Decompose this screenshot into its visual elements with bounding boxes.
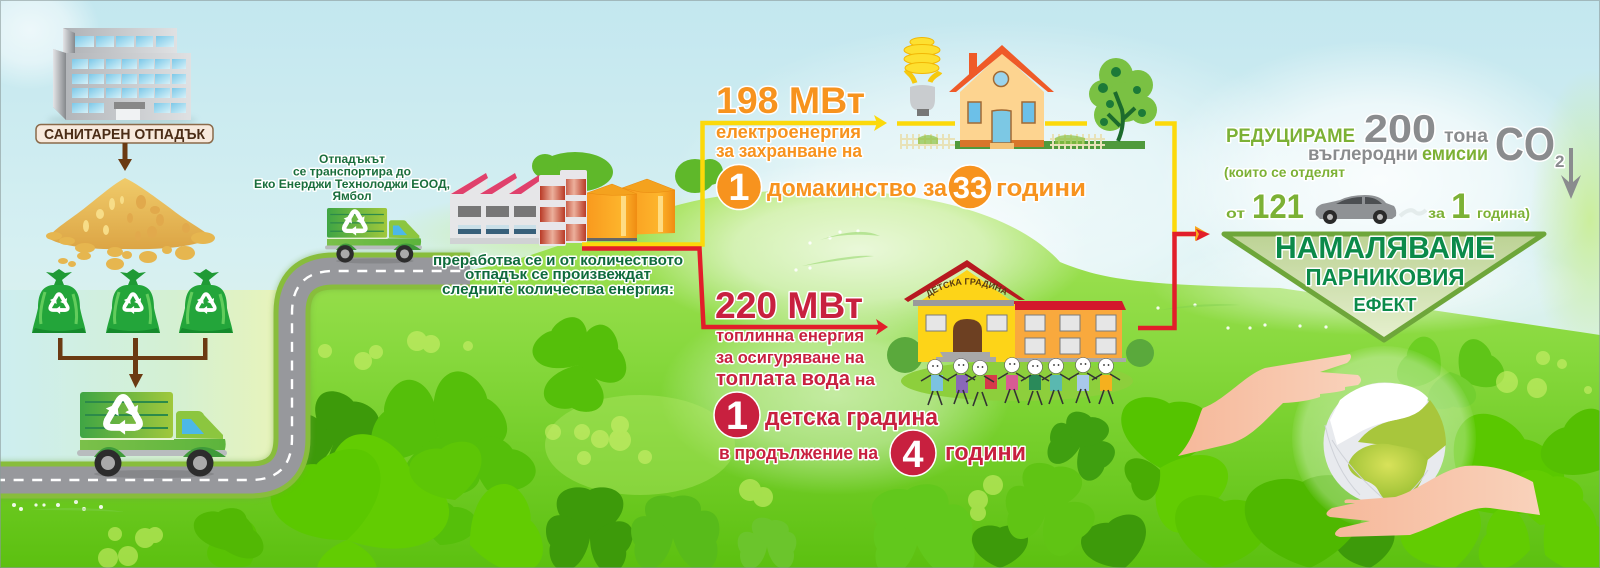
- icon: green recycling bags: [32, 269, 233, 333]
- electricity block: електроенергия: [716, 122, 861, 142]
- electricity block: [716, 80, 1086, 210]
- electricity block: 1: [728, 167, 750, 209]
- text: cars per year: от: [1226, 205, 1245, 221]
- yellow flow line: electricity: [582, 115, 1209, 244]
- arrow: CO2 down: [1561, 148, 1581, 199]
- panel: reduce greenhouse effect triangle: ЕФЕКТ: [1354, 295, 1416, 315]
- text: cars per year: година): [1477, 205, 1530, 221]
- icon: tree: [1089, 58, 1157, 141]
- illustration: kindergarten with children: [887, 260, 1154, 406]
- connector arrows: bags to truck: [58, 338, 208, 388]
- panel: reduce greenhouse effect triangle: НАМАЛЯВАМЕ: [1275, 230, 1495, 265]
- icon: factory with tanks: [450, 152, 723, 246]
- text: reduction of CO2: CO: [1495, 118, 1555, 170]
- text: processing caption: [433, 252, 683, 298]
- arrow: building to waste pile: [118, 143, 132, 171]
- heat block: за осигуряване на: [716, 348, 865, 367]
- icon: energy saving bulb: [904, 38, 940, 116]
- heat block: години: [945, 439, 1026, 466]
- decorative bokeh and sparkles: [12, 229, 1592, 568]
- text: waste transport: [254, 154, 450, 203]
- text: waste transport: се транспортира до: [293, 166, 411, 178]
- text: cars per year: 1: [1451, 187, 1470, 226]
- text: waste transport: Отпадъкът: [319, 154, 385, 166]
- heat block: в продължение на: [719, 443, 879, 463]
- text: reduction of CO2: емисии: [1422, 144, 1488, 165]
- red flow line: heat: [582, 229, 1210, 335]
- label: sanitary waste: САНИТАРЕН ОТПАДЪК: [44, 126, 206, 143]
- text: reduction of CO2: РЕДУЦИРАМЕ: [1226, 126, 1355, 147]
- text: cars per year: за: [1428, 205, 1445, 221]
- text: reduction of CO2: 200: [1364, 108, 1436, 151]
- electricity block: 33: [953, 170, 987, 205]
- heat block: детска градина: [765, 404, 939, 431]
- road with truck route: [0, 271, 470, 480]
- panel: reduce greenhouse effect triangle: [1224, 230, 1544, 340]
- electricity block: 198 МВт: [716, 80, 865, 121]
- heat block: 220 МВт: [715, 285, 863, 326]
- heat block: топлата вода: [716, 368, 851, 390]
- text: processing caption: следните количества енергия:: [442, 281, 674, 298]
- icon: house with garden: [900, 45, 1145, 149]
- icon: car with exhaust: [1316, 195, 1426, 224]
- waste pile: [46, 178, 215, 270]
- text: cars per year: [1226, 187, 1530, 226]
- text: reduction of CO2: тона: [1444, 126, 1488, 147]
- text: waste transport: Еко Енерджи Технолоджи ЕООД,: [254, 179, 450, 191]
- text: reduction of CO2: (които се отделят: [1224, 165, 1345, 180]
- office building: [47, 28, 197, 127]
- icon: globe held by hands: [1178, 346, 1540, 537]
- text: processing caption: преработва се и от количеството: [433, 252, 683, 269]
- heat block: [714, 285, 1026, 476]
- electricity block: години: [996, 175, 1086, 202]
- heat block: на: [855, 372, 875, 389]
- panel: reduce greenhouse effect triangle: ПАРНИКОВИЯ: [1306, 264, 1464, 290]
- text: reduction of CO2: въглеродни: [1308, 144, 1418, 165]
- heat block: топлинна енергия: [716, 326, 864, 345]
- electricity block: домакинство за: [767, 175, 948, 202]
- icon: large recycling truck: [77, 392, 227, 478]
- heat block: 4: [902, 434, 924, 476]
- text: waste transport: Ямбол: [332, 191, 372, 203]
- illustration: kindergarten with children: ДЕТСКА ГРАДИНА: [926, 278, 1006, 299]
- text: cars per year: 121: [1252, 188, 1304, 226]
- icon: small recycling truck: [325, 208, 422, 264]
- text: reduction of CO2: 2: [1555, 152, 1564, 171]
- electricity block: за захранване на: [716, 141, 863, 161]
- heat block: 1: [726, 394, 748, 438]
- decorative clover leaves: [192, 311, 1600, 568]
- text: processing caption: отпадък се произвеждат: [465, 266, 651, 283]
- text: reduction of CO2: [1224, 108, 1564, 180]
